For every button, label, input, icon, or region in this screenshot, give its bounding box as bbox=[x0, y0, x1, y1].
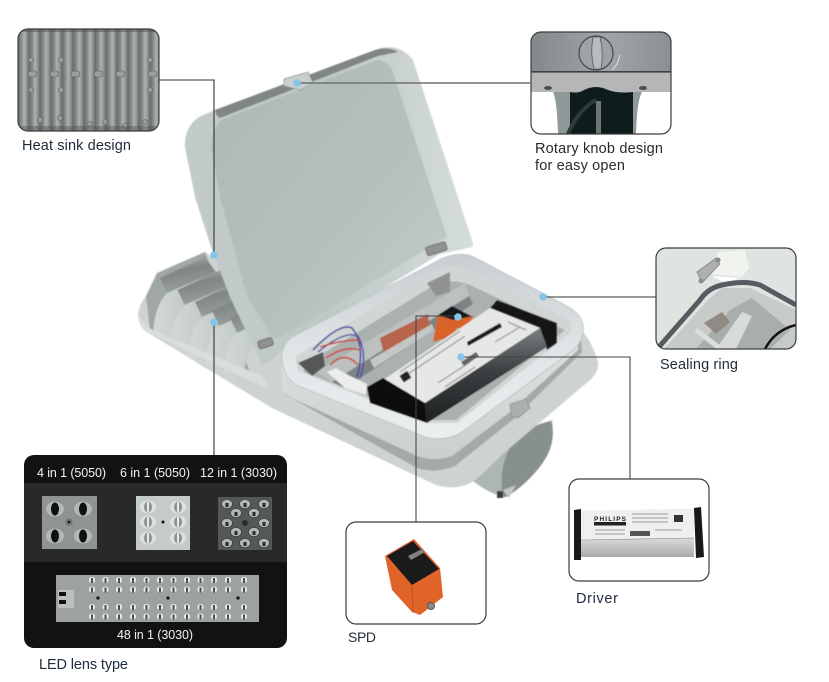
wiring and terminal block bbox=[313, 327, 367, 395]
heat sink fins bbox=[138, 252, 292, 390]
lens: 12 in 1 bbox=[218, 497, 272, 550]
lens captions: 6 in 1 (5050) bbox=[120, 466, 190, 480]
label: heat sink design: Heat sink design bbox=[22, 138, 131, 154]
leader line: SPD bbox=[416, 316, 457, 522]
lens captions bbox=[37, 466, 277, 642]
lens captions: 4 in 1 (5050) bbox=[37, 466, 106, 480]
panel: rotary knob design bbox=[531, 32, 671, 134]
label: sealing ring: Sealing ring bbox=[660, 357, 738, 373]
open lid bbox=[185, 47, 473, 365]
label: driver: Driver bbox=[576, 591, 618, 607]
panel: sealing ring bbox=[656, 248, 796, 350]
leader line: driver bbox=[461, 357, 630, 479]
leader line: heat sink bbox=[159, 80, 214, 255]
panel: driver bbox=[569, 479, 709, 581]
label: rotary knob design bbox=[535, 141, 663, 174]
label: SPD: SPD bbox=[348, 629, 376, 645]
illustration: open luminaire bbox=[138, 47, 598, 498]
LED driver in housing bbox=[367, 300, 557, 423]
sealed tray bbox=[282, 254, 583, 471]
callout dots bbox=[210, 79, 547, 361]
leader line: LED lens bbox=[213, 322, 215, 456]
lens: 4 in 1 bbox=[42, 496, 97, 549]
leader line: rotary knob bbox=[297, 82, 531, 84]
lens: 6 in 1 bbox=[136, 496, 190, 550]
leader line: sealing ring bbox=[543, 296, 656, 298]
label: rotary knob design: Rotary knob design bbox=[535, 141, 663, 157]
panel: SPD bbox=[346, 522, 486, 624]
label: rotary knob design: for easy open bbox=[535, 158, 625, 174]
luminaire base housing bbox=[138, 252, 598, 487]
icon: SPD module bbox=[385, 539, 443, 615]
pole clamp bbox=[462, 420, 553, 498]
icon: Philips driver: PHILIPS bbox=[594, 516, 627, 523]
panel: heat sink design bbox=[18, 29, 159, 131]
lens captions: 12 in 1 (3030) bbox=[200, 466, 277, 480]
lens captions: 48 in 1 (3030) bbox=[117, 628, 193, 642]
lens: 48 in 1 bbox=[56, 575, 259, 622]
latch hinge bbox=[510, 399, 530, 418]
label: LED lens type: LED lens type bbox=[39, 657, 128, 673]
SPD in housing bbox=[433, 306, 474, 342]
panel: LED lens types bbox=[24, 455, 287, 648]
mounting rails bbox=[298, 272, 473, 388]
